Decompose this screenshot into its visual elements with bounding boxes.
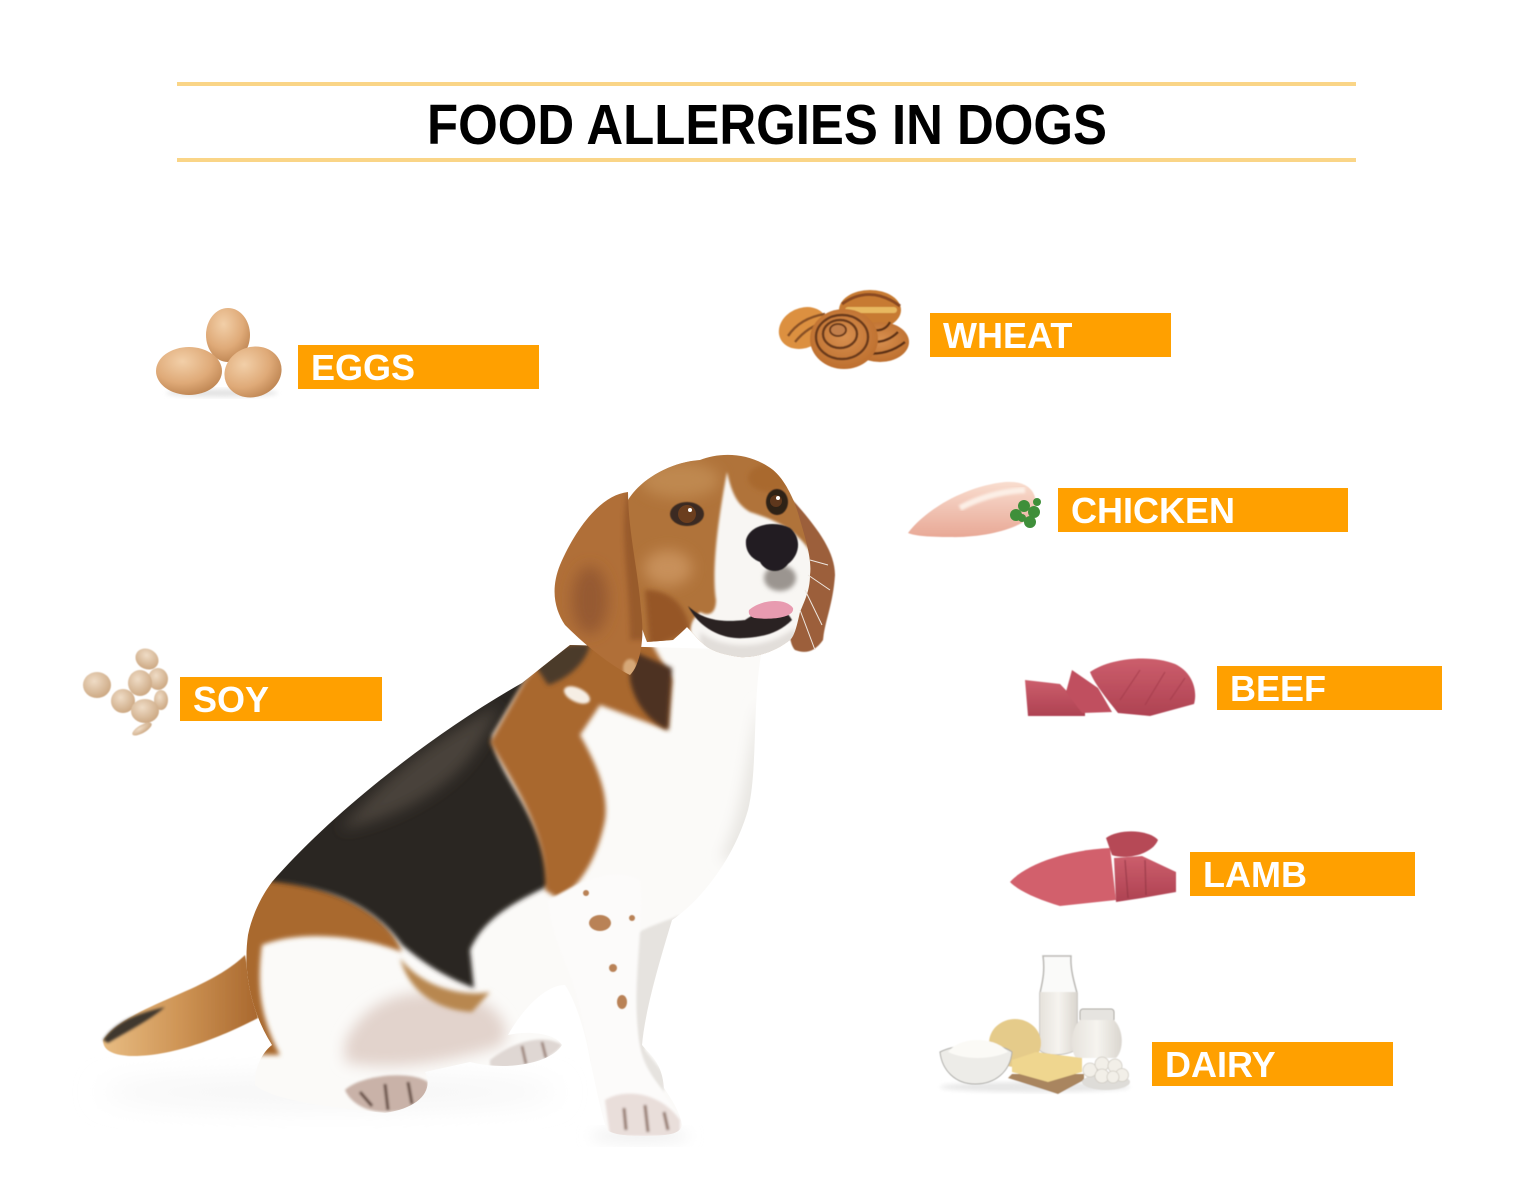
leg spots xyxy=(583,890,635,1009)
dog xyxy=(100,450,835,1150)
rear front leg shade xyxy=(636,916,677,1090)
label: beef: BEEF xyxy=(1230,668,1326,709)
label: eggs xyxy=(298,345,539,389)
hip brown xyxy=(235,870,402,1055)
small white collar patch xyxy=(562,684,592,706)
label: wheat: WHEAT xyxy=(943,315,1072,356)
butter on board xyxy=(1008,1074,1084,1094)
shoulder brown xyxy=(490,630,672,900)
label: chicken xyxy=(1058,488,1348,532)
label: dairy xyxy=(1152,1042,1393,1086)
head xyxy=(545,450,835,680)
right ear xyxy=(789,497,835,652)
label: soy xyxy=(180,677,382,721)
icon: soy beans xyxy=(83,644,168,738)
icon: lamb xyxy=(1010,831,1176,906)
left ear xyxy=(554,492,642,675)
belly fur xyxy=(345,993,506,1066)
tail xyxy=(103,955,258,1056)
icon: wheat buns xyxy=(772,290,909,369)
label: eggs: EGGS xyxy=(311,347,415,388)
nose xyxy=(746,524,798,571)
icon: chicken breast xyxy=(908,482,1041,537)
label: lamb: LAMB xyxy=(1203,854,1307,895)
mouth xyxy=(688,606,792,638)
icon: beef xyxy=(1025,658,1195,716)
label: wheat xyxy=(930,313,1171,357)
icon: dairy xyxy=(940,956,1130,1094)
white blaze and muzzle xyxy=(691,472,820,660)
mozzarella xyxy=(1082,1074,1130,1090)
black saddle xyxy=(255,665,550,988)
label: chicken: CHICKEN xyxy=(1071,490,1235,531)
milk carafe xyxy=(1040,956,1077,1054)
grey under muzzle xyxy=(699,629,796,657)
shadow xyxy=(100,1078,560,1106)
front leg xyxy=(551,882,654,1079)
label: soy: SOY xyxy=(193,679,269,720)
eyes xyxy=(670,502,704,526)
label: dairy: DAIRY xyxy=(1165,1044,1276,1085)
title block xyxy=(177,82,1356,162)
whiskers xyxy=(800,560,830,650)
cheese wheel xyxy=(989,1019,1041,1067)
paw shading xyxy=(345,1040,680,1136)
label: beef xyxy=(1217,666,1442,710)
tongue xyxy=(749,601,793,619)
title: FOOD ALLERGIES IN DOGS xyxy=(427,93,1107,157)
body xyxy=(246,645,756,1136)
label: lamb xyxy=(1190,852,1415,896)
milk jar xyxy=(1080,1009,1114,1022)
white chest shading xyxy=(723,726,755,859)
cottage cheese bowl xyxy=(940,1044,1012,1084)
icon: eggs xyxy=(156,308,289,405)
